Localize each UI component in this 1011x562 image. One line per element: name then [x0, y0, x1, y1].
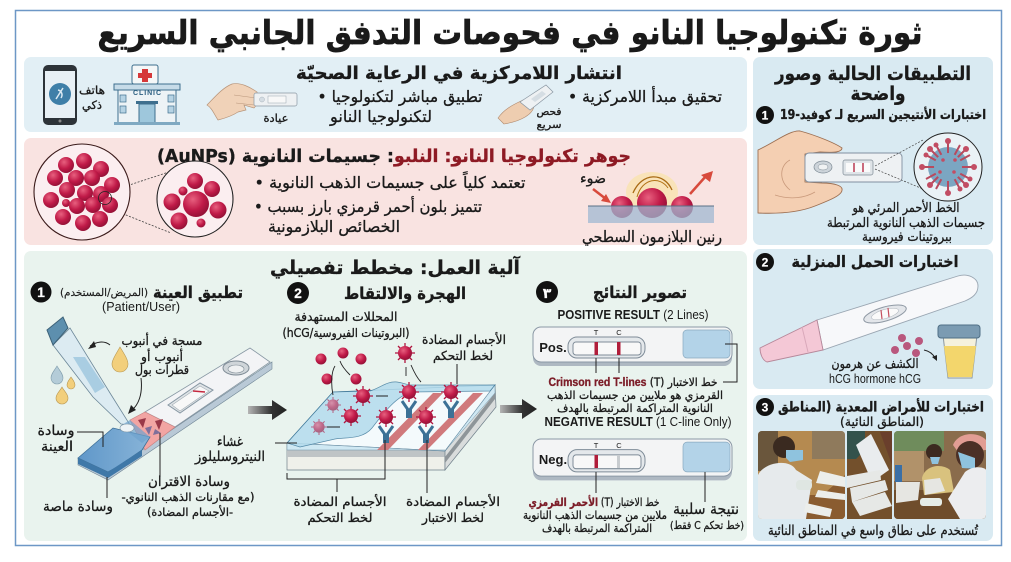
- badge: 1: 1: [762, 108, 769, 122]
- label: swab or urine drops: أنبوب أو: [140, 348, 183, 365]
- label: smartphone: هاتف: [79, 83, 105, 97]
- test cassette: positive: [533, 327, 732, 366]
- step 3: result imaging: [523, 281, 744, 536]
- heading: infectious diseases: (المناطق النائية): [840, 414, 924, 430]
- caption: covid test: جسيمات الذهب النانوية المرتبطة: [827, 216, 985, 231]
- label: nitrocellulose membrane: النيتروسليلوز: [194, 449, 265, 465]
- label: swab or urine drops: قطرات بول: [135, 362, 189, 378]
- badge: 1: 1: [37, 284, 45, 300]
- caption: covid test: الخط الأحمر المرئي هو: [852, 199, 960, 216]
- label: conjugate pad: (مع مقارنات الذهب النانوي-: [122, 490, 254, 505]
- label: target analytes: [282, 309, 410, 341]
- label: absorbent pad: [43, 477, 113, 515]
- label: absorbent pad: وسادة ماصة: [43, 499, 113, 515]
- bullets: nanoparticle facts: الخصائص البلازمونية: [268, 217, 400, 237]
- heading: home pregnancy tests: اختبارات الحمل المنزلية: [792, 253, 958, 271]
- leaders: negative: [596, 472, 705, 502]
- illustration: pregnancy test: [760, 275, 978, 362]
- leaders and bracket: [275, 440, 427, 493]
- bullet: decentralization principle: تحقيق مبدأ اللامركزية •: [568, 86, 722, 107]
- heading: positive result: POSITIVE RESULT (2 Lines): [558, 308, 708, 322]
- badge: 1: [756, 106, 774, 124]
- illustration: hCG dots and urine cup: [891, 325, 980, 378]
- label: sample pad: وسادة: [38, 423, 74, 439]
- illustration: swab tube and drops: [47, 317, 141, 425]
- diagram: surface plasmon resonance: رنين البلازمون السطحي: [582, 228, 722, 247]
- illustration: analytes and capture antibodies: [311, 343, 461, 443]
- heading: migration and capture: الهجرة والالتقاط: [344, 284, 466, 304]
- explanation: negative result: المتراكمة المرتبطة بالهدف: [542, 521, 652, 536]
- test cassette: positive: C: [616, 328, 622, 337]
- label: conjugate pad: -الأجسام المضادة): [147, 505, 233, 519]
- photo: test strips: [847, 431, 892, 519]
- label: control line antibodies: لخط التحكم: [308, 510, 372, 526]
- caption: covid test: ببروتينات فيروسية: [862, 230, 952, 245]
- label: test line antibodies: لخط الاختبار: [421, 510, 484, 526]
- label: negative result: (خط تحكم C فقط): [670, 519, 744, 532]
- label: conjugate pad: وسادة الاقتران: [148, 474, 230, 490]
- label: conjugate pad: [122, 433, 254, 519]
- bullets: nanoparticle facts: [254, 170, 526, 237]
- illustration: membrane cross section: [287, 382, 496, 470]
- bullets: nanoparticle facts: تتميز بلون أحمر قرمزي بارز بسبب •: [254, 196, 482, 217]
- icon: smartphone: [43, 65, 77, 125]
- badge: 2: [287, 282, 309, 304]
- badge: 1: [30, 282, 52, 302]
- test cassette: positive: T: [594, 328, 599, 337]
- icon: hand with test at clinic: [207, 84, 297, 125]
- label: negative result: نتيجة سلبية: [673, 500, 739, 518]
- photo: health worker at table: [758, 431, 845, 519]
- test cassette: negative: [533, 439, 732, 480]
- panel: home pregnancy tests: [753, 249, 993, 389]
- panel: gold nanoparticles: [24, 138, 747, 247]
- caption: hCG hormone: [829, 357, 921, 386]
- explanation: negative result: [523, 495, 667, 536]
- badge: 2: [756, 253, 774, 271]
- label: swab or urine drops: مسجة في أنبوب: [122, 332, 202, 349]
- explanation: positive result: [547, 375, 723, 416]
- label: control line antibodies: [294, 494, 386, 526]
- explanation: negative result: خط الاختبار (T) الأحمر القرمزي: [528, 495, 660, 510]
- heading: mechanism: آلية العمل: مخطط تفصيلي: [270, 255, 520, 279]
- badge: 3: [536, 281, 558, 303]
- label: test line antibodies: الأجسام المضادة: [406, 494, 500, 509]
- bullet: direct application: تطبيق مباشر لتكنولوجيا •: [318, 87, 482, 107]
- panel: mechanism of action: [24, 251, 747, 541]
- heading: current applications: واضحة: [850, 83, 906, 105]
- heading: sample application: [60, 283, 243, 314]
- heading: decentralization: انتشار اللامركزية في الرعاية الصحيّة: [296, 63, 622, 84]
- panel: decentralization in healthcare: [24, 57, 747, 132]
- label: control line antibodies top: الأجسام المضادة: [422, 332, 506, 347]
- caption: covid test: [827, 199, 985, 245]
- illustration: virus magnification: [875, 133, 982, 201]
- label: sample pad: [38, 423, 103, 455]
- panel: current applications: [753, 57, 993, 245]
- explanation: positive result: النانوية المتراكمة المرتبطة بالهدف: [557, 401, 713, 416]
- icon: hand with quick test: سريع: [536, 119, 562, 131]
- arrow: step 1 to step 2: [248, 400, 287, 420]
- icon: hand with test at clinic: عيادة: [264, 112, 288, 125]
- badge: 3: ٣: [543, 286, 552, 302]
- heading: sample application: تطبيق العينة: [153, 283, 243, 303]
- diagram: surface plasmon resonance: [580, 171, 722, 247]
- caption: hCG hormone: الكشف عن هرمون: [832, 357, 918, 372]
- label: negative result: [670, 500, 744, 532]
- test cassette: negative: T: [594, 441, 599, 450]
- arrow: step 2 to step 3: [500, 399, 537, 419]
- icon: hand with quick test: [498, 85, 562, 131]
- badge: 3: [756, 398, 774, 416]
- label: swab or urine drops: [122, 332, 202, 378]
- heading: current applications: [774, 63, 971, 105]
- illustration: lateral flow strip: [78, 348, 272, 480]
- label: target analytes: المحللات المستهدفة: [294, 309, 398, 325]
- label: nitrocellulose membrane: غشاء: [217, 434, 243, 450]
- bullet: direct application: [318, 87, 482, 127]
- test cassette: negative: C: [616, 441, 622, 450]
- icon: clinic building: CLINIC: [133, 90, 161, 97]
- heading: gold nanoparticles: جوهر تكنولوجيا النانو: النلبو: جسيمات النانوية (AuNPs): [157, 146, 631, 167]
- heading: current applications: التطبيقات الحالية وصور: [774, 63, 971, 85]
- explanation: positive result: خط الاختبار (T) Crimson red T-lines: [548, 375, 718, 390]
- panel: infectious diseases in remote areas: [753, 395, 993, 541]
- label: target analytes: (البروتينات الفيروسية/hCG): [282, 326, 410, 341]
- badge: 2: 2: [762, 256, 769, 270]
- heading: sample application: (Patient/User): [102, 300, 180, 314]
- label: smartphone: ذكي: [82, 98, 102, 112]
- label: control line antibodies top: لخط التحكم: [433, 348, 493, 364]
- label: control line antibodies top: [422, 332, 506, 384]
- illustration: nanoparticle cluster: [34, 144, 172, 240]
- step 2: migration and capture: [275, 282, 506, 526]
- label: test line antibodies: [406, 494, 500, 526]
- bullets: nanoparticle facts: تعتمد كلياً على جسيمات الذهب النانوية •: [254, 170, 526, 193]
- badge: 2: 2: [294, 285, 302, 301]
- heading: negative result: NEGATIVE RESULT (1 C-line Only): [544, 415, 732, 429]
- photo: nurse and patient: [894, 431, 986, 519]
- title: ثورة تكنولوجيا النانو في فحوصات التدفق الجانبي السريع: [98, 13, 922, 53]
- explanation: negative result: ملايين من جسيمات الذهب النانوية: [523, 508, 667, 523]
- badge: 3: 3: [762, 400, 769, 414]
- label: nitrocellulose membrane: [194, 434, 265, 465]
- diagram: surface plasmon resonance: ضوء: [580, 171, 606, 187]
- label: sample pad: العينة: [41, 439, 73, 455]
- illustration: hand holding covid test: [758, 131, 902, 213]
- step 1: sample application: [30, 282, 272, 519]
- heading: infectious diseases: [778, 398, 984, 430]
- test cassette: negative: Neg.: [539, 452, 567, 467]
- icon: hand with quick test: فحص: [536, 106, 562, 118]
- bullet: direct application: لتكنولوجيا النانو: [329, 107, 432, 127]
- leaders: positive: [596, 344, 737, 382]
- test cassette: positive: Pos.: [539, 340, 567, 355]
- heading: result imaging: تصوير النتائج: [593, 283, 687, 303]
- heading: sample application: (المريض/المستخدم): [60, 287, 148, 299]
- caption: hCG hormone: hCG hormone hCG: [829, 372, 921, 386]
- explanation: positive result: القرمزي هو ملايين من جسيمات الذهب: [547, 388, 723, 403]
- icon: clinic building: [114, 65, 180, 125]
- label: control line antibodies: الأجسام المضادة: [294, 494, 386, 509]
- label: smartphone: [79, 83, 105, 112]
- caption: remote areas: تُستخدم على نطاق واسع في المناطق النائية: [768, 523, 979, 539]
- illustration: magnified nanoparticles: [157, 161, 233, 237]
